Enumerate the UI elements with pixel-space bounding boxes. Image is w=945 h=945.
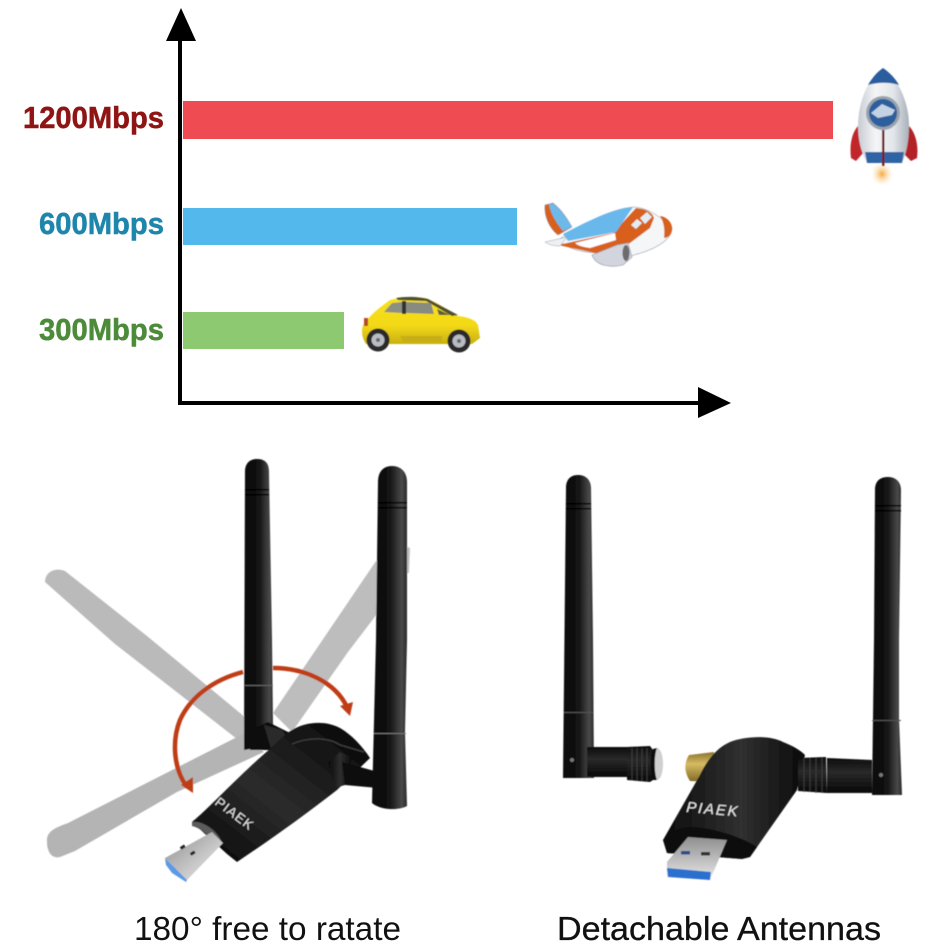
antenna connector right	[798, 757, 872, 793]
connector: front	[328, 752, 378, 788]
dongle body	[192, 723, 370, 862]
x axis arrow	[178, 387, 731, 418]
dongle curved crease	[292, 739, 364, 752]
brand label: PIAEK	[686, 799, 740, 821]
icon: airplane	[545, 203, 672, 266]
chart: speed comparison	[23, 8, 833, 418]
label: 300Mbps: 300Mbps	[39, 312, 164, 347]
gold connector	[685, 752, 714, 782]
panel: rotating antenna photo	[45, 459, 410, 882]
antenna: upright front	[372, 466, 407, 809]
antenna: upright rear	[244, 459, 274, 750]
usb plug	[165, 832, 223, 882]
dongle front face	[663, 827, 757, 859]
dongle body	[663, 737, 805, 859]
label: 1200Mbps: 1200Mbps	[23, 100, 164, 135]
antenna connector left	[587, 746, 663, 782]
connector: rear	[250, 722, 290, 752]
y axis arrow	[166, 8, 196, 405]
rotation arrow	[175, 668, 353, 793]
bar: 600Mbps	[183, 208, 517, 245]
usb collar	[192, 822, 221, 842]
icon: car	[362, 297, 480, 352]
brand label: PIAEK	[212, 794, 257, 833]
ghost antennas	[45, 545, 410, 857]
label: 600Mbps: 600Mbps	[39, 206, 164, 241]
usb plug	[667, 837, 727, 880]
panel: detachable antenna photo	[563, 475, 902, 880]
bar: 1200Mbps	[183, 101, 833, 139]
bar: 300Mbps	[183, 312, 344, 349]
antenna: detached left	[563, 475, 594, 778]
antenna: detached right	[872, 477, 902, 795]
icon: rocket	[850, 68, 917, 186]
